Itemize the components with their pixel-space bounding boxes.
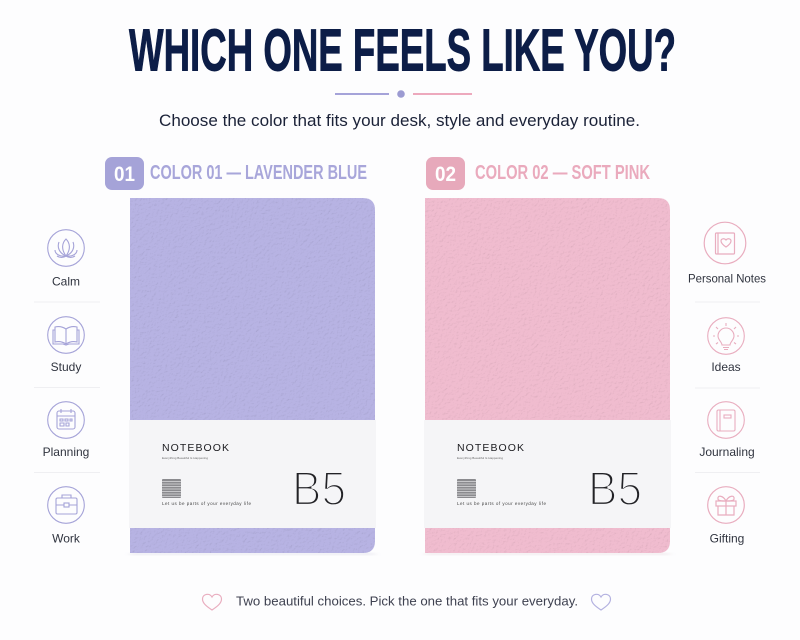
label: ideas: Ideas xyxy=(711,360,741,374)
label: journaling: Journaling xyxy=(699,445,755,459)
lavender paper band: NOTEBOOK xyxy=(162,442,229,454)
icon: notebook with heart (personal notes) xyxy=(704,222,746,264)
heading: color 01 xyxy=(105,157,367,190)
pink paper band: B5 xyxy=(588,463,642,516)
notebook: soft pink xyxy=(423,198,673,555)
icon: pink heart xyxy=(202,594,222,610)
icon: briefcase (work) xyxy=(48,487,84,523)
left column: moods xyxy=(34,230,100,545)
pink paper band: Everything Beautiful Is Happening xyxy=(457,456,503,460)
heading: color 01: COLOR 01 — LAVENDER BLUE xyxy=(150,162,367,184)
footer message xyxy=(202,594,610,610)
heading: color 02: 02 xyxy=(435,163,456,186)
lavender cover xyxy=(130,198,375,553)
label: planning: Planning xyxy=(43,445,89,459)
pink paper band xyxy=(424,420,671,528)
icon: lavender heart xyxy=(592,594,610,610)
heading: color 01: 01 xyxy=(114,163,135,186)
title divider xyxy=(335,90,472,98)
heading: color 02: COLOR 02 — SOFT PINK xyxy=(475,162,650,184)
heading: color 02 xyxy=(426,157,650,190)
lavender paper band xyxy=(129,420,376,528)
notebook: lavender blue xyxy=(128,198,378,555)
icon: open book (study) xyxy=(48,317,84,353)
lavender paper band: Everything Beautiful Is Happening xyxy=(162,456,208,460)
icon: gift (gifting) xyxy=(708,487,744,523)
label: gifting: Gifting xyxy=(710,532,744,546)
label: personal notes: Personal Notes xyxy=(688,272,766,286)
pink paper band: Let us be parts of your everyday life xyxy=(457,501,546,506)
icon: lotus (calm) xyxy=(48,230,84,266)
label: calm: Calm xyxy=(52,274,80,288)
label: work: Work xyxy=(52,532,81,546)
footer text: Two beautiful choices. Pick the one that fits your everyday. xyxy=(236,594,578,608)
pink paper band: NOTEBOOK xyxy=(457,442,524,454)
lavender paper band: B5 xyxy=(292,463,346,516)
icon: light bulb (ideas) xyxy=(708,318,744,354)
icon: calendar (planning) xyxy=(48,402,84,438)
icon: journal (journaling) xyxy=(708,402,744,438)
subtitle: Choose the color that fits your desk, style and everyday routine. xyxy=(159,112,640,130)
lavender paper band: Let us be parts of your everyday life xyxy=(162,501,251,506)
label: study: Study xyxy=(51,360,81,374)
right column: uses xyxy=(688,222,766,545)
pink cover xyxy=(425,198,670,553)
